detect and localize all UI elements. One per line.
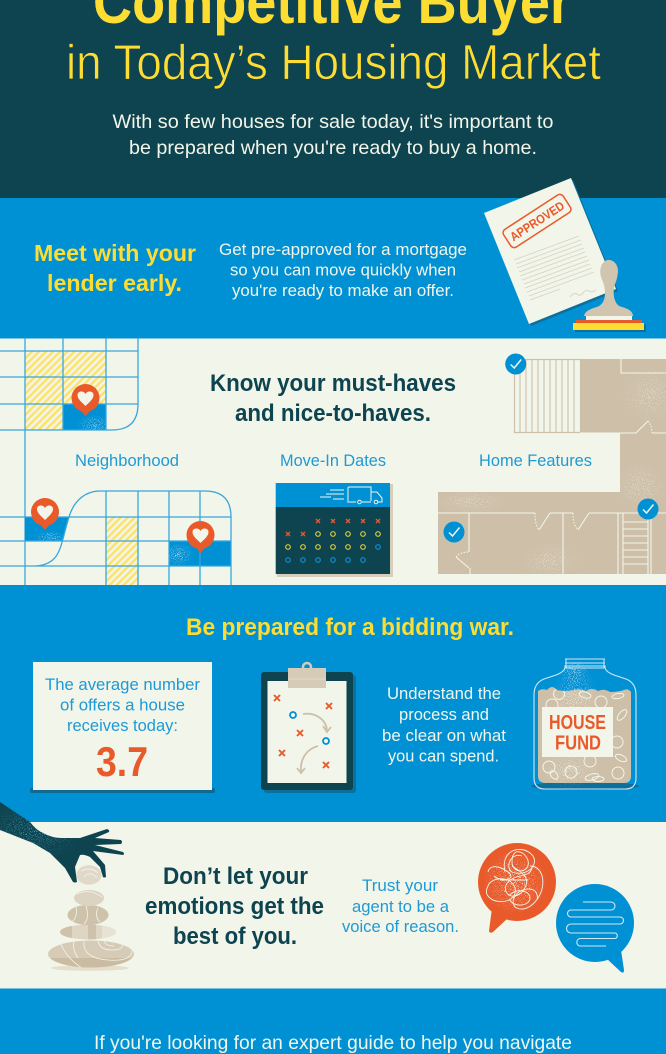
heading: know your must-haves: and nice-to-haves. xyxy=(235,400,431,427)
icon: stamp xyxy=(573,260,646,332)
text: trust your agent: voice of reason. xyxy=(342,918,459,936)
intro text xyxy=(112,111,554,159)
label: move-in dates: Move-In Dates xyxy=(280,451,386,470)
icon: check marks xyxy=(444,354,658,542)
calendar marks xyxy=(286,519,380,562)
panel: meet with your lender xyxy=(0,178,666,338)
heading: meet with your lender early: lender early. xyxy=(47,270,182,296)
heading: don't let your emotions: emotions get the xyxy=(145,893,324,920)
icon: approved document xyxy=(484,178,646,332)
text: understand the process: you can spend. xyxy=(388,748,499,766)
card: average number of offers xyxy=(30,662,215,793)
floor plan: home features xyxy=(432,354,666,578)
map: neighborhood top xyxy=(0,338,138,585)
text: understand the process xyxy=(382,685,506,766)
heading: don't let your emotions xyxy=(145,863,324,950)
text: trust your agent: agent to be a xyxy=(352,898,450,916)
label: neighborhood: Neighborhood xyxy=(75,451,179,470)
panel: bidding war xyxy=(30,618,639,793)
icon: house fund jar xyxy=(531,659,639,790)
jar label xyxy=(542,707,613,757)
heading: meet with your lender early: Meet with your xyxy=(34,240,196,266)
icon: orange speech bubble xyxy=(478,843,556,933)
stone: fourth xyxy=(60,924,116,940)
text: get pre-approved xyxy=(219,240,467,300)
card: average number of offers: of offers a house xyxy=(60,696,185,714)
heading: be prepared for a bidding war: Be prepared for a bidding war. xyxy=(186,614,514,641)
text: understand the process: be clear on what xyxy=(382,727,506,745)
text: understand the process: process and xyxy=(399,706,489,724)
heading: know your must-haves xyxy=(210,370,456,427)
heading: don't let your emotions: Don’t let your xyxy=(163,863,308,890)
intro text: be prepared when you're ready to buy a home. xyxy=(129,137,537,159)
text: get pre-approved: Get pre-approved for a mortgage xyxy=(219,240,467,259)
icon: stacked stones xyxy=(48,865,134,971)
calendar: move-in dates xyxy=(276,483,393,577)
map: neighborhood bottom xyxy=(0,491,231,585)
panel: header xyxy=(0,0,666,198)
icon: approved document: APPROVED xyxy=(507,199,567,244)
jar label: FUND xyxy=(555,732,601,754)
icon: clipboard play xyxy=(261,663,356,793)
footer text: If you're looking for an expert guide to help you navigate xyxy=(94,1032,572,1054)
card: average number of offers: receives today: xyxy=(67,717,178,735)
stone: third xyxy=(68,905,108,925)
panel: must-haves and nice-to-haves xyxy=(0,336,666,587)
stone: bottom xyxy=(48,940,134,968)
icon: hand placing stone xyxy=(0,800,124,882)
text: understand the process: Understand the xyxy=(387,685,501,703)
heading: don't let your emotions: best of you. xyxy=(173,923,297,950)
intro text: With so few houses for sale today, it's important to xyxy=(112,111,554,133)
panel: footer xyxy=(0,988,666,1054)
text: get pre-approved: you're ready to make an offer. xyxy=(232,281,454,300)
text: get pre-approved: so you can move quickly when xyxy=(230,260,456,280)
icon: blue speech bubble xyxy=(556,884,634,973)
stone: top xyxy=(76,865,102,885)
label: home features: Home Features xyxy=(479,451,592,470)
title: in Today’s Housing Market xyxy=(66,36,601,90)
text: trust your agent: Trust your xyxy=(362,877,439,895)
heading: know your must-haves: Know your must-haves xyxy=(210,370,456,397)
heading: meet with your lender early xyxy=(34,240,196,296)
deck stripes xyxy=(514,359,580,433)
jar label: HOUSE xyxy=(549,712,606,734)
panel: emotions xyxy=(0,822,666,988)
stone: second xyxy=(74,890,104,906)
card: average number of offers: The average number xyxy=(45,676,200,694)
text: trust your agent xyxy=(342,877,459,936)
title xyxy=(66,0,601,90)
stat: 3.7: 3.7 xyxy=(96,738,148,785)
icon: moving truck xyxy=(320,487,382,504)
